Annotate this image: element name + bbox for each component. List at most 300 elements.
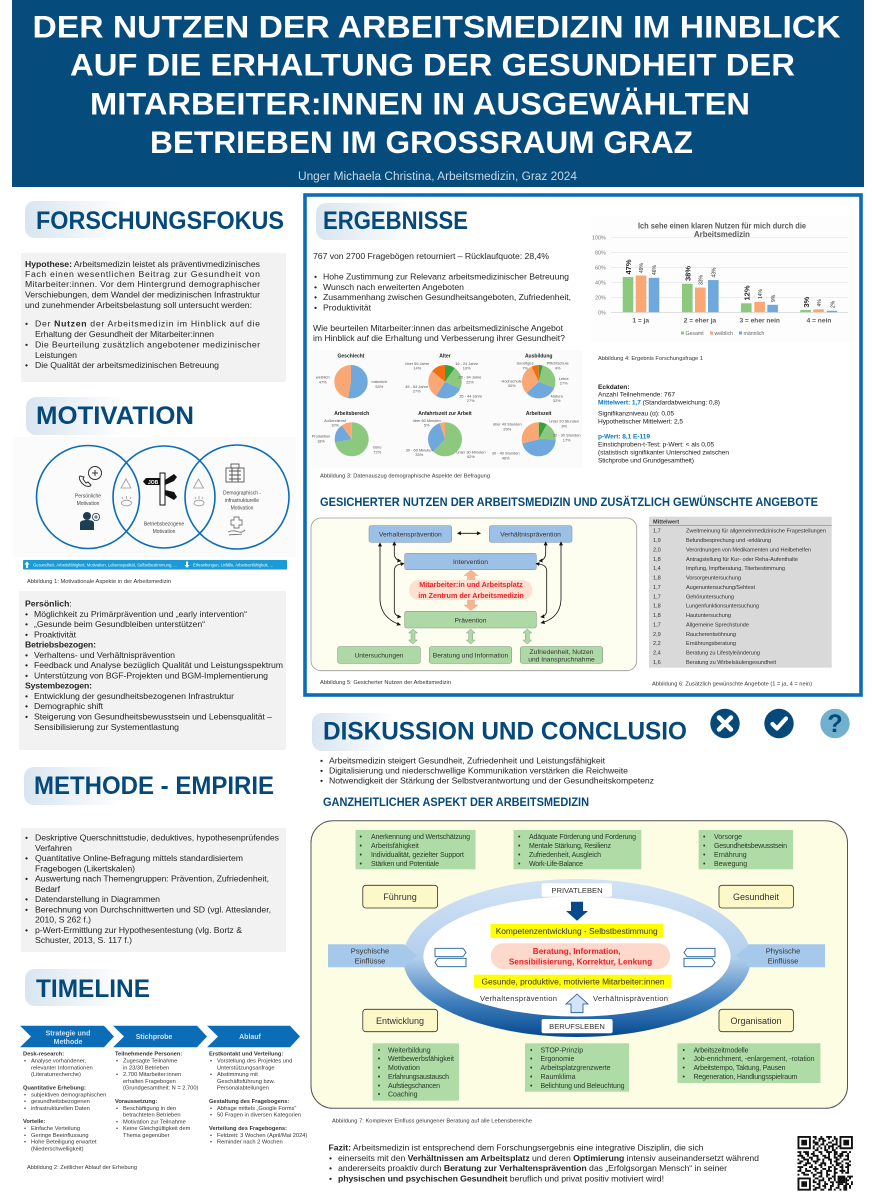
timeline column 1: subjektiven demographischen bbox=[31, 1092, 106, 1098]
green box: psychische items: • bbox=[518, 834, 521, 841]
timeline column 3: • bbox=[210, 1112, 212, 1118]
text: Diskussion bullets: • bbox=[320, 755, 323, 765]
chart title: Arbeitsmedizin bbox=[694, 230, 750, 239]
legend bar: motivation: Erkrankungen, Unfälle, Arbeitsunfähigkeit, ... bbox=[193, 563, 273, 568]
panel: Forschungsfokus text: Die Beurteilung zusätzlich angebotener medizinischer bbox=[35, 340, 260, 350]
label: Berufsleben: BERUFSLEBEN bbox=[549, 1022, 605, 1031]
callout: physische Einflüsse: Physische bbox=[766, 946, 800, 956]
bars: 2 = eher ja bbox=[682, 266, 719, 324]
bar chart: Nutzen: 60% bbox=[595, 265, 606, 271]
table: zusätzlich gewünschte Angebote: 1,4 bbox=[653, 566, 661, 572]
pie: Ausbildung: Hochschule bbox=[502, 378, 522, 383]
panel: Forschungsfokus text: Die Qualität der arbeitsmedizinischen Betreuung bbox=[35, 360, 219, 370]
chevron: Strategie und Methode: Methode bbox=[54, 1039, 82, 1046]
icon: question: ? bbox=[827, 710, 843, 738]
panel: Forschungsfokus text: Erhaltung der Gesundheit der Mitarbeiter:innen bbox=[35, 329, 214, 339]
chevron: Ablauf bbox=[207, 1026, 300, 1047]
text: Ergebnisse summary bbox=[313, 251, 571, 343]
box: Entwicklung bbox=[363, 1009, 438, 1032]
centre label: Mitarbeiter und Arbeitsplatz: im Zentrum der Arbeitsmedizin bbox=[418, 591, 524, 600]
box: Führung: Führung bbox=[383, 892, 417, 902]
timeline column 1: gesundheitsbezogenen bbox=[31, 1099, 90, 1105]
label: betriebsbezogene Motivation: Betriebsbezogene bbox=[144, 522, 184, 528]
label: Berufsleben bbox=[542, 1019, 613, 1033]
bars: 3 = eher nein: 12% bbox=[742, 285, 752, 300]
green box: Entwicklung items: • bbox=[378, 1074, 381, 1081]
table: zusätzlich gewünschte Angebote: 1,7 bbox=[653, 529, 661, 535]
panel: motivation details: Verhaltens- und Verhältnisprävention bbox=[34, 650, 175, 660]
panel: Methode text: p-Wert-Ermittlung zur Hypothesentestung (vlg. Bortz & bbox=[35, 925, 242, 935]
green box: Organisation items: Arbeitszeitmodelle bbox=[694, 1048, 749, 1054]
green box: Gesundheit items: Gesundheitsbewusstsein bbox=[714, 843, 787, 850]
box: Zufriedenheit bbox=[520, 647, 603, 664]
timeline column 3: 50 Fragen in diversen Kategorien bbox=[217, 1112, 301, 1118]
label: betriebsbezogene Motivation: Motivation bbox=[153, 529, 176, 535]
bars: 2 = eher ja: 43% bbox=[712, 267, 718, 278]
panel: motivation details: Steigerung von Gesundheitsbewusstsein und Lebensqualität – bbox=[34, 712, 272, 722]
bars: 4 = nein: 4 = nein bbox=[807, 318, 831, 324]
table: zusätzlich gewünschte Angebote: Ernährungsberatung bbox=[686, 641, 736, 647]
QR code bbox=[798, 1136, 853, 1191]
bars: 3 = eher nein: 14% bbox=[758, 288, 764, 299]
panel: motivation details: Betriebsbezogen: bbox=[25, 640, 96, 650]
box: Intervention: Intervention bbox=[453, 559, 488, 566]
panel: Forschungsfokus text: Hypothese: Arbeitsmedizin leistet als präventivmedizinisches bbox=[25, 259, 261, 269]
timeline column 1: Quantitative Erhebung: bbox=[23, 1086, 86, 1092]
panel: motivation details: • bbox=[25, 701, 28, 711]
bar chart: Nutzen: 80% bbox=[595, 250, 606, 256]
timeline column 2: betrachteten Betrieben bbox=[123, 1112, 181, 1118]
timeline column 2: (Grundgesamtheit: N = 2.700) bbox=[123, 1086, 199, 1092]
pie: Anfahrtszeit zur Arbeit bbox=[406, 411, 486, 459]
table: zusätzlich gewünschte Angebote: Vorsorgeuntersuchung bbox=[686, 576, 741, 582]
heading: Timeline: TIMELINE bbox=[36, 975, 150, 1003]
arrows: black feedback loops bbox=[380, 545, 561, 625]
bars: 4 = nein bbox=[800, 296, 837, 324]
pie: Anfahrtszeit zur Arbeit: 30 - 60 Minuten bbox=[406, 447, 433, 452]
icon: building bbox=[226, 464, 244, 482]
box: Untersuchungen: Untersuchungen bbox=[354, 652, 404, 660]
pie: Alter: 27% bbox=[413, 389, 421, 394]
green box: psychische items: • bbox=[518, 843, 521, 850]
timeline column 1: • bbox=[24, 1099, 26, 1105]
panel: motivation details: • bbox=[25, 660, 28, 670]
pie: Arbeitsbereich: 72% bbox=[373, 450, 382, 455]
timeline column 1: Vorteile: bbox=[23, 1119, 45, 1125]
title: MITARBEITER:INNEN IN AUSGEWÄHLTEN bbox=[90, 86, 750, 122]
panel: motivation details: • bbox=[25, 670, 28, 680]
pie: Ausbildung bbox=[502, 354, 569, 403]
panel: Methode text: Berechnung von Durchschnittwerten und SD (vgl. Atteslander, bbox=[35, 904, 271, 914]
label: persönliche Motivation: Motivation bbox=[77, 501, 100, 507]
timeline column 2: in 23/30 Betrieben bbox=[123, 1065, 169, 1071]
timeline column 3: Geschäftsführung bzw. bbox=[217, 1079, 275, 1085]
chart title bbox=[638, 222, 807, 239]
panel: Ergebnisse frame bbox=[305, 195, 861, 695]
pie: Arbeitsbereich: Produktion bbox=[312, 434, 330, 439]
pie: Geschlecht: 53% bbox=[375, 384, 384, 389]
label: gesunde Mitarbeiter: Gesunde, produktive, motivierte Mitarbeiter:innen bbox=[482, 976, 665, 986]
heading: Timeline bbox=[25, 969, 150, 1006]
text: Fazit: einerseits mit den Verhältnissen am Arbeitsplatz und deren Optimierung intensiv auseinandersetzt während bbox=[338, 1153, 759, 1163]
green box: Organisation items: • bbox=[682, 1074, 686, 1081]
pie: Arbeitszeit bbox=[492, 411, 581, 460]
green box: Gesundheit items: Ernährung bbox=[714, 852, 747, 859]
bars: 3 = eher nein: 3 = eher nein bbox=[739, 318, 780, 324]
green box: Entwicklung items: • bbox=[378, 1056, 381, 1063]
heading: Diskussion und Conclusio: DISKUSSION UND CONCLUSIO bbox=[323, 718, 687, 746]
pie: Geschlecht bbox=[316, 354, 387, 390]
timeline column 2: Beschäftigung in den bbox=[123, 1106, 176, 1112]
panel: Methode text: • bbox=[25, 904, 28, 914]
timeline column 3: • bbox=[210, 1058, 212, 1064]
table: zusätzlich gewünschte Angebote: Befundbesprechung und -erklärung bbox=[686, 538, 771, 544]
panel: motivation details bbox=[19, 591, 286, 750]
timeline column 3: Abfrage mittels „Google Forms“ bbox=[217, 1106, 296, 1112]
timeline column 2: Teilnehmende Personen: bbox=[115, 1052, 182, 1058]
heading: Ergebnisse bbox=[316, 203, 468, 240]
bar chart: Nutzen: 20% bbox=[595, 295, 606, 301]
text: Diskussion bullets: Notwendigkeit der Stärkung der Selbstverantwortung und der Gesundheitskompetenz bbox=[329, 776, 654, 786]
green box: Verhältnis items: Belichtung und Beleuchtung bbox=[540, 1083, 625, 1090]
panel: motivation details: Entwicklung der gesundheitsbezogenen Infrastruktur bbox=[34, 691, 234, 701]
icon: question bbox=[820, 709, 850, 738]
table: zusätzlich gewünschte Angebote: Verordnungen von Medikamenten und Heilbehelfen bbox=[686, 548, 811, 554]
panel: Forschungsfokus text: • bbox=[25, 340, 28, 350]
green box: Organisation items: Regeneration, Handlungsspielraum bbox=[694, 1074, 798, 1081]
text: Fazit: andererseits proaktiv durch Beratung zur Verhaltensprävention das „Erfolgsorgan Mensch“ in seiner bbox=[338, 1163, 727, 1173]
pie: Alter bbox=[405, 354, 482, 403]
timeline column 1: (Niederschwelligkeit) bbox=[31, 1146, 84, 1152]
pie: Arbeitszeit: 30 - 40 Stunden bbox=[492, 450, 520, 455]
text: Ergebnisse summary: • bbox=[314, 282, 317, 292]
label: Kompetenzentwicklung: Kompetenzentwicklung - Selbstbestimmung bbox=[496, 926, 658, 936]
text: Ergebnisse summary: Produktivität bbox=[323, 302, 372, 312]
timeline column 3: Verteilung des Fragebogens: bbox=[209, 1126, 287, 1132]
pie: Arbeitsbereich bbox=[312, 411, 382, 455]
green box: Verhältnis items: • bbox=[530, 1056, 533, 1063]
timeline column 2: Keine Gleichgültigkeit dem bbox=[123, 1126, 191, 1132]
arrow: up light blue bbox=[566, 994, 588, 1013]
caption: Abbildung 4: Abbildung 4: Ergebnis Forschungsfrage 1 bbox=[598, 356, 703, 362]
box: Verhältnisprävention: Verhältnisprävention bbox=[500, 532, 561, 538]
box: Organisation: Organisation bbox=[730, 1016, 782, 1026]
text: Diskussion bullets: • bbox=[320, 776, 323, 786]
chart legend: Gesamt bbox=[686, 331, 704, 337]
green box: Führung items: • bbox=[360, 852, 362, 859]
panel: motivation details: Sensibilisierung zur Systementlastung bbox=[34, 722, 179, 732]
chevron: Strategie und Methode bbox=[20, 1026, 114, 1047]
timeline column 2: • bbox=[116, 1126, 118, 1132]
green box: Organisation items: Arbeitstempo, Taktung, Pausen bbox=[694, 1065, 786, 1072]
timeline column 1: • bbox=[24, 1106, 26, 1112]
green box: Organisation items bbox=[677, 1043, 820, 1083]
green box: Entwicklung items: Aufstiegschancen bbox=[388, 1083, 440, 1090]
bar chart: Nutzen: 40% bbox=[595, 280, 606, 286]
box: Verhältnisprävention bbox=[489, 526, 572, 542]
text: Eckdaten: Hypothetischer Mittelwert: 2,5 bbox=[598, 419, 683, 426]
timeline column 2: • bbox=[116, 1119, 118, 1125]
timeline column 3: Erstkontakt und Verteilung: bbox=[209, 1052, 283, 1058]
timeline column 3: • bbox=[210, 1072, 212, 1078]
timeline column 1: • bbox=[24, 1140, 26, 1146]
table: zusätzlich gewünschte Angebote: 2,0 bbox=[653, 548, 661, 554]
text: Eckdaten: Einstichproben-t-Test: p-Wert: < als 0,05 bbox=[598, 442, 714, 449]
bars: 2 = eher ja: 2 = eher ja bbox=[684, 318, 717, 324]
pie: Arbeitszeit: 29% bbox=[503, 427, 512, 432]
venn diagram: motivation bbox=[13, 437, 296, 557]
green box: Verhältnis items: Arbeitsplatzgrenzwerte bbox=[540, 1065, 611, 1072]
text: Ergebnisse summary: Hohe Zustimmung zur Relevanz arbeitsmedizinischer Betreuung bbox=[323, 272, 569, 282]
heading: Methode - Empirie bbox=[24, 767, 274, 805]
timeline column 1: • bbox=[24, 1126, 26, 1132]
icon: doctor bbox=[80, 512, 100, 530]
icon: check bbox=[764, 709, 794, 738]
timeline column 3: Unterstützungsanfrage bbox=[217, 1065, 275, 1071]
bar chart: Nutzen: 0% bbox=[598, 310, 606, 316]
timeline column 2: 2.700 Mitarbeiter:innen bbox=[123, 1072, 181, 1078]
panel: Forschungsfokus text: Fach einen wesentlichen Beitrag zur Gesundheit von bbox=[25, 269, 260, 279]
timeline column 1 bbox=[23, 1052, 106, 1152]
text: Ergebnisse summary: im Hinblick auf die Erhaltung und Verbesserung ihrer Gesundheit? bbox=[313, 333, 565, 343]
green box: Organisation items: • bbox=[682, 1048, 686, 1054]
bars: 1 = ja: 47% bbox=[624, 259, 633, 274]
table: zusätzlich gewünschte Angebote: 1,9 bbox=[653, 538, 661, 544]
pie: Alter: über 55 Jahre bbox=[405, 361, 429, 366]
label: Beratung red: Beratung, Information, bbox=[533, 947, 621, 956]
table: zusätzlich gewünschte Angebote: Zweitmeinung für allgemeinmedizinische Fragestellungen bbox=[686, 529, 826, 535]
pie: Ausbildung: 30% bbox=[508, 383, 516, 388]
table: zusätzlich gewünschte Angebote: Beratung zu Lifestyleänderung bbox=[686, 651, 760, 657]
table: zusätzlich gewünschte Angebote: Hautuntersuchung bbox=[686, 613, 731, 619]
green box: Führung items: • bbox=[360, 861, 362, 868]
panel: Methode text: Deskriptive Querschnittstudie, deduktives, hypothesenprüfendes bbox=[35, 832, 280, 842]
bars: 1 = ja: 49% bbox=[639, 262, 645, 273]
pie: Ausbildung: 4% bbox=[555, 366, 561, 371]
timeline column 3: • bbox=[210, 1106, 212, 1112]
table: zusätzlich gewünschte Angebote: Antragstellung für Kur- oder Reha-Aufenthalte bbox=[686, 557, 798, 563]
green box: Entwicklung items: Motivation bbox=[388, 1065, 420, 1072]
table: zusätzlich gewünschte Angebote: 1,8 bbox=[653, 557, 661, 563]
panel: Methode text bbox=[21, 828, 286, 952]
pie: Arbeitszeit: unter 20 Stunden bbox=[549, 418, 579, 423]
table: zusätzlich gewünschte Angebote: 2,2 bbox=[653, 641, 661, 647]
arrow: between prevention types bbox=[460, 532, 480, 534]
table: zusätzlich gewünschte Angebote: Allgemeine Sprechstunde bbox=[686, 622, 749, 628]
panel: motivation details: • bbox=[25, 650, 28, 660]
bars: 1 = ja: 46% bbox=[652, 264, 658, 275]
label: Kompetenzentwicklung bbox=[490, 924, 663, 938]
panel: Forschungsfokus text: Leistungen bbox=[35, 350, 77, 360]
timeline column 1: • bbox=[24, 1058, 26, 1064]
panel: motivation details: Systembezogen: bbox=[25, 680, 92, 690]
icon: job signpost bbox=[143, 473, 177, 505]
pie: Ausbildung: Pflichtschule bbox=[547, 361, 569, 366]
box: Organisation bbox=[719, 1009, 794, 1032]
text: Eckdaten: Anzahl Teilnehmende: 767 bbox=[598, 391, 675, 398]
pie: Arbeitsbereich: 18% bbox=[317, 438, 325, 443]
pie: Ausbildung: Matura bbox=[551, 393, 564, 398]
arrows: orange up and down bbox=[464, 570, 478, 610]
timeline column 2: • bbox=[116, 1072, 118, 1078]
box: Verhaltensprävention bbox=[369, 526, 452, 542]
panel: Forschungsfokus text: Der Nutzen der Arbeitsmedizin im Hinblick auf die bbox=[35, 318, 260, 328]
title: AUF DIE ERHALTUNG DER GESUNDHEIT DER bbox=[70, 46, 795, 82]
box: Verhaltensprävention: Verhaltensprävention bbox=[379, 532, 442, 538]
green box: Verhältnis items: Ergonomie bbox=[540, 1056, 574, 1063]
panel: motivation details: • bbox=[25, 609, 28, 619]
icon: warning triangle right bbox=[194, 479, 204, 488]
box: Gesundheit: Gesundheit bbox=[733, 892, 780, 902]
text: Diskussion bullets: Digitalisierung und niederschwellige Kommunikation verstärken die Reichweite bbox=[329, 765, 628, 775]
bars: 3 = eher nein: 9% bbox=[771, 294, 777, 302]
panel: Methode text: Bedarf bbox=[35, 884, 61, 894]
pie: Alter: Alter bbox=[439, 354, 451, 360]
text: Fazit: Fazit: Arbeitsmedizin ist entsprechend dem Forschungsergebnis eine integrative Disziplin, die sich bbox=[328, 1142, 704, 1152]
text: Eckdaten: p-Wert: 8,1 E-119 bbox=[598, 434, 650, 441]
chevron: Stichprobe: Stichprobe bbox=[136, 1034, 172, 1041]
panel: Methode text: Datendarstellung in Diagrammen bbox=[35, 894, 160, 904]
panel: Methode text: • bbox=[25, 894, 28, 904]
centre label: Mitarbeiter und Arbeitsplatz bbox=[409, 580, 532, 600]
pie: Arbeitsbereich: 10% bbox=[331, 423, 339, 428]
green box: Entwicklung items: • bbox=[378, 1092, 381, 1098]
panel: Forschungsfokus text: Verschiebungen, dem Wandel der medizinischen Infrastruktur bbox=[25, 290, 260, 300]
pie: Ausbildung: Ausbildung bbox=[525, 354, 552, 360]
subtitle: Unger Michaela Christina, Arbeitsmedizin, Graz 2024 bbox=[298, 171, 578, 183]
text: Ergebnisse summary: Zusammenhang zwischen Gesundheitsangeboten, Zufriedenheit, bbox=[323, 292, 571, 302]
pie: Ausbildung: 27% bbox=[560, 381, 568, 386]
timeline column 3 bbox=[209, 1052, 307, 1146]
green box: Führung items: Arbeitsfähigkeit bbox=[371, 843, 419, 850]
table: zusätzlich gewünschte Angebote: 1,7 bbox=[653, 622, 661, 628]
green box: Gesundheit items bbox=[699, 830, 793, 869]
pie: Anfahrtszeit zur Arbeit: 62% bbox=[467, 454, 475, 459]
panel: motivation details: Feedback und Analyse bezüglich Qualität und Leistungsspektrum bbox=[34, 660, 283, 670]
box: Beratung und Information: Beratung und Information bbox=[433, 652, 509, 660]
pie: Arbeitsbereich: Arbeitsbereich bbox=[334, 411, 369, 417]
text: Fazit: physischen und psychischen Gesundheit beruflich und privat positiv motiviert wird! bbox=[338, 1173, 664, 1183]
green box: Verhältnis items: • bbox=[530, 1074, 533, 1081]
icon: job signpost: JOB bbox=[148, 480, 159, 486]
pie: Ausbildung: Sonstiges bbox=[516, 361, 534, 366]
pie: Arbeitsbereich: Büro bbox=[373, 445, 381, 450]
label: Verhältnisprävention: Verhältnisprävention bbox=[593, 994, 668, 1003]
heading: Gesicherter Nutzen: GESICHERTER NUTZEN DER ARBEITSMEDIZIN UND ZUSÄTZLICH GEWÜNSCHTE ANGEBOTE bbox=[320, 496, 818, 509]
table: zusätzlich gewünschte Angebote: Augenuntersuchung/Sehtest bbox=[686, 585, 755, 591]
panel: Methode text: Fragebogen (Likertskalen) bbox=[35, 864, 135, 874]
table: zusätzlich gewünschte Angebote: 1,8 bbox=[653, 613, 661, 619]
green box: Verhältnis items: • bbox=[530, 1083, 533, 1090]
heading: Ergebnisse: ERGEBNISSE bbox=[323, 207, 468, 235]
green box: Verhältnis items: • bbox=[530, 1065, 533, 1072]
icon: phone with plus bbox=[79, 466, 102, 486]
heading: Methode - Empirie: METHODE - EMPIRIE bbox=[34, 772, 274, 800]
pie: Ausbildung: 32% bbox=[553, 398, 561, 403]
bars: 2 = eher ja: 33% bbox=[698, 274, 704, 285]
green box: Entwicklung items: Erfahrungsaustausch bbox=[388, 1074, 449, 1081]
legend bar: motivation: Gesundheit, Arbeitsfähigkeit, Motivation, Lebensqualität, Selbstbestimmung, ... bbox=[33, 563, 177, 568]
bars: 2 = eher ja: 38% bbox=[684, 266, 692, 281]
green box: Verhältnis items: STOP-Prinzip bbox=[540, 1048, 583, 1054]
heading: Forschungsfokus: FORSCHUNGSFOKUS bbox=[36, 207, 284, 235]
green box: psychische items: Work-Life-Balance bbox=[529, 861, 583, 868]
icon: eye right bbox=[194, 496, 204, 506]
timeline column 2: Zugesagte Teilnahme bbox=[123, 1058, 177, 1064]
text: Diskussion bullets: Arbeitsmedizin steigert Gesundheit, Zufriedenheit und Leistungsfähigkeit bbox=[329, 755, 606, 765]
pie: Alter: 25 - 34 Jahre bbox=[459, 375, 481, 380]
pie: Arbeitszeit: über 40 Stunden bbox=[493, 422, 522, 427]
callout: psychische Einflüsse: Einflüsse bbox=[355, 956, 385, 965]
table: zusätzlich gewünschte Angebote: 2,4 bbox=[653, 651, 661, 657]
heading: Motivation bbox=[26, 397, 194, 435]
text: Eckdaten: (statistisch signifikanter Unterschied zwischen bbox=[598, 450, 729, 457]
pie: Alter: 14% bbox=[413, 366, 422, 371]
box: Zufriedenheit: Zufriedenheit, Nutzen bbox=[530, 649, 594, 656]
green box: Entwicklung items: • bbox=[378, 1065, 381, 1072]
arrow: down dark blue bbox=[566, 902, 588, 921]
box: Gesundheit bbox=[719, 885, 794, 908]
panel: Methode text: Quantitative Online-Befragung mittels standardisiertem bbox=[35, 853, 243, 863]
chart legend: männlich bbox=[744, 331, 764, 337]
box: Prävention: Prävention bbox=[455, 617, 487, 624]
box: Entwicklung: Entwicklung bbox=[376, 1016, 424, 1026]
text: Eckdaten bbox=[598, 384, 729, 465]
timeline column 1: infrastrukturellen Daten bbox=[31, 1106, 90, 1112]
panel: Forschungsfokus text: • bbox=[25, 360, 28, 370]
panel: Methode text: 2010, S 262 f.) bbox=[35, 914, 91, 924]
timeline column 3: Abstimmung mit bbox=[217, 1072, 258, 1078]
chevron: Ablauf: Ablauf bbox=[239, 1034, 262, 1041]
green box: psychische items bbox=[514, 830, 641, 869]
green box: Verhältnis items: Raumklima bbox=[540, 1074, 576, 1081]
label: Privatleben: PRIVATLEBEN bbox=[551, 886, 603, 895]
table: zusätzlich gewünschte Angebote: Beratung zu Wirbelsäulengesundheit bbox=[686, 660, 776, 666]
text: Ergebnisse summary: • bbox=[314, 292, 317, 302]
pie: Anfahrtszeit zur Arbeit: Anfahrtszeit zur Arbeit bbox=[418, 411, 472, 417]
green box: Entwicklung items bbox=[373, 1043, 459, 1101]
green box: Gesundheit items: Bewegung bbox=[714, 861, 747, 868]
green box: psychische items: Mentale Stärkung, Resilienz bbox=[529, 843, 612, 850]
panel: motivation details: • bbox=[25, 630, 28, 640]
label: persönliche Motivation: Persönliche bbox=[75, 494, 101, 500]
title: DER NUTZEN DER ARBEITSMEDIZIN IM HINBLICK bbox=[32, 8, 841, 44]
arrows: small pentagons left bbox=[435, 948, 466, 967]
timeline column 3: Gestaltung des Fragebogens: bbox=[209, 1099, 289, 1105]
panel: Forschungsfokus text: und zunehmender Arbeitsbelastung soll untersucht werden: bbox=[25, 300, 252, 310]
timeline column 3: Feldzeit: 3 Wochen (April/Mai 2024) bbox=[217, 1133, 307, 1139]
pie: Anfahrtszeit zur Arbeit: 33% bbox=[415, 452, 424, 457]
box: Prävention bbox=[405, 611, 536, 628]
panel: motivation details: Proaktivität bbox=[34, 630, 77, 640]
text: Diskussion bullets: • bbox=[320, 765, 323, 775]
timeline column 2: erhalten Fragebogen bbox=[123, 1079, 176, 1085]
panel: motivation details: Unterstützung von BGF-Projekten und BGM-Implementierung bbox=[34, 670, 268, 680]
green box: Gesundheit items: • bbox=[703, 843, 706, 850]
pie: Ausbildung: Lehre bbox=[559, 376, 569, 381]
text: Fazit: • bbox=[329, 1173, 332, 1183]
timeline column 3: • bbox=[210, 1133, 212, 1139]
green box: psychische items: • bbox=[518, 861, 521, 868]
arrows: small pentagons right bbox=[684, 948, 715, 967]
chevron: Strategie und Methode: Strategie und bbox=[46, 1030, 90, 1038]
gridlines and axis labels bbox=[611, 237, 848, 312]
timeline column 2: • bbox=[116, 1058, 118, 1064]
chart legend: weiblich bbox=[714, 331, 733, 337]
panel: Methode text: Auswertung nach Themengruppen: Prävention, Zufriedenheit, bbox=[35, 874, 269, 884]
green box: Verhältnis items bbox=[525, 1043, 629, 1092]
text: Ergebnisse summary: • bbox=[314, 272, 317, 282]
